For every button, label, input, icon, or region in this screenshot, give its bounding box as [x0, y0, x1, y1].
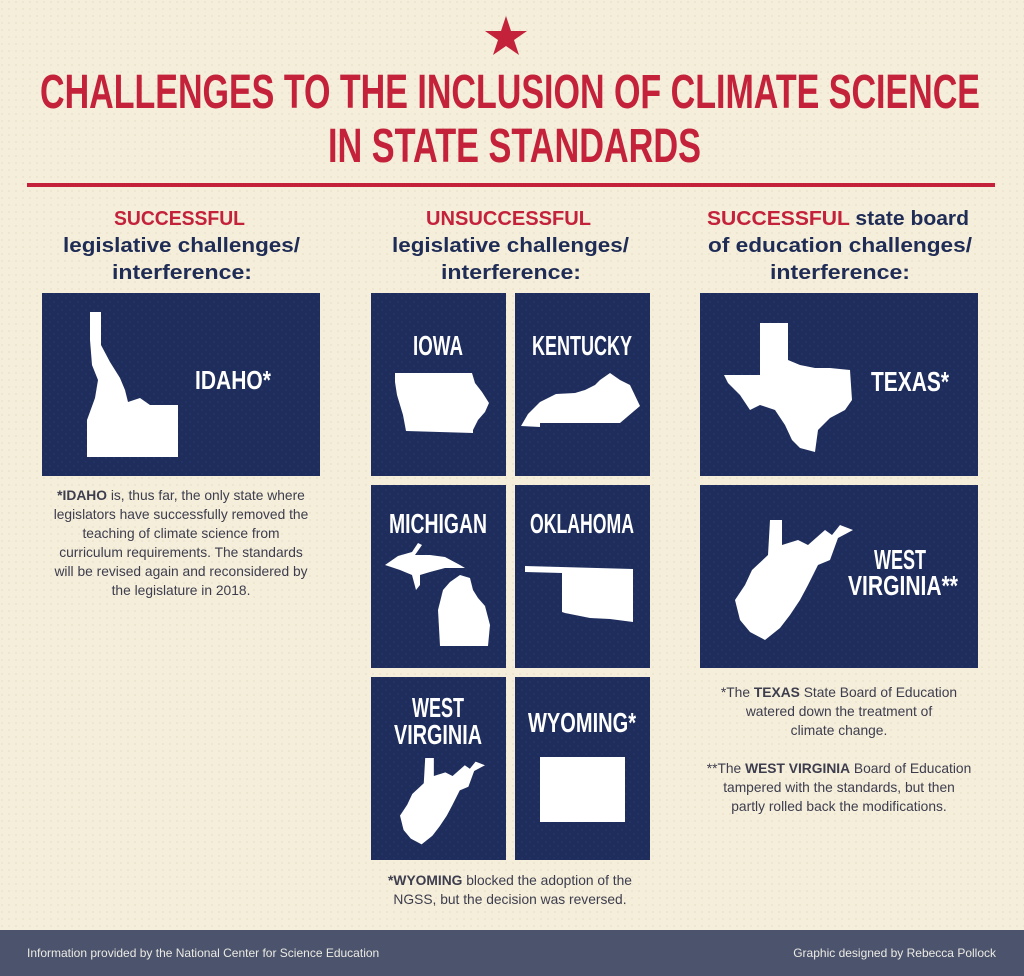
text: board notes: tampered with the standards, but then	[723, 780, 955, 795]
text: wyoming note: NGSS, but the decision was reversed.	[393, 892, 627, 907]
panel: west virginia (legislative)	[371, 677, 506, 860]
text: idaho note: curriculum requirements. The standards	[59, 545, 303, 560]
panel: wyoming: WYOMING*	[528, 707, 636, 738]
panel: michigan	[371, 485, 506, 668]
panel: texas: TEXAS*	[871, 366, 949, 397]
title: IN STATE STANDARDS	[328, 120, 701, 173]
panel: west virginia (board)	[700, 485, 978, 668]
panel: west virginia (board): VIRGINIA**	[848, 570, 958, 601]
panel: west virginia (legislative): VIRGINIA	[394, 719, 482, 750]
heading: successful state board: SUCCESSFUL state board	[707, 208, 969, 230]
heading: successful legislative: SUCCESSFUL	[114, 208, 245, 230]
panel: iowa	[371, 293, 506, 476]
text: board notes: **The WEST VIRGINIA Board of Education	[707, 761, 971, 776]
text: idaho note: teaching of climate science from	[82, 526, 280, 541]
text: wyoming note	[388, 873, 632, 907]
heading: successful state board: of education challenges/	[708, 235, 972, 257]
text: board notes	[707, 685, 971, 814]
text: idaho note	[53, 488, 309, 598]
heading: successful state board: interference:	[770, 262, 910, 284]
panel: idaho	[42, 293, 320, 476]
heading: unsuccessful legislative	[392, 208, 629, 284]
title	[40, 66, 980, 173]
panel: kentucky	[515, 293, 650, 476]
text: wyoming note: *WYOMING blocked the adoption of the	[388, 873, 632, 888]
heading: unsuccessful legislative: interference:	[441, 262, 581, 284]
heading: unsuccessful legislative: UNSUCCESSFUL	[426, 208, 591, 230]
text: board notes: *The TEXAS State Board of Education	[721, 685, 957, 700]
heading: successful legislative: legislative challenges/	[63, 235, 300, 257]
text: board notes: watered down the treatment of	[745, 704, 932, 719]
panel: idaho: IDAHO*	[195, 365, 272, 395]
heading: successful state board	[707, 208, 972, 284]
text: idaho note: legislators have successfully removed the	[54, 507, 309, 522]
panel: oklahoma: OKLAHOMA	[530, 508, 634, 539]
panel: texas	[700, 293, 978, 476]
heading: successful legislative	[63, 208, 300, 284]
panel: iowa: IOWA	[413, 330, 463, 361]
icon: star	[485, 16, 527, 55]
heading: successful legislative: interference:	[112, 262, 252, 284]
panel: oklahoma	[515, 485, 650, 668]
footer: Information provided by the National Center for Science Education	[27, 946, 379, 960]
panel: west virginia (board): WEST	[874, 544, 926, 575]
text: idaho note: *IDAHO is, thus far, the only state where	[57, 488, 305, 503]
text: idaho note: will be revised again and reconsidered by	[53, 564, 308, 579]
panel: west virginia (legislative): WEST	[412, 692, 464, 723]
panel: kentucky: KENTUCKY	[532, 330, 632, 361]
panel: wyoming	[515, 677, 650, 860]
text: board notes: partly rolled back the modifications.	[731, 799, 947, 814]
text: idaho note: the legislature in 2018.	[112, 583, 250, 598]
panel: michigan: MICHIGAN	[389, 508, 487, 539]
text: board notes: climate change.	[791, 723, 887, 738]
footer	[0, 930, 1024, 976]
heading: unsuccessful legislative: legislative challenges/	[392, 235, 629, 257]
footer: Graphic designed by Rebecca Pollock	[793, 946, 997, 960]
